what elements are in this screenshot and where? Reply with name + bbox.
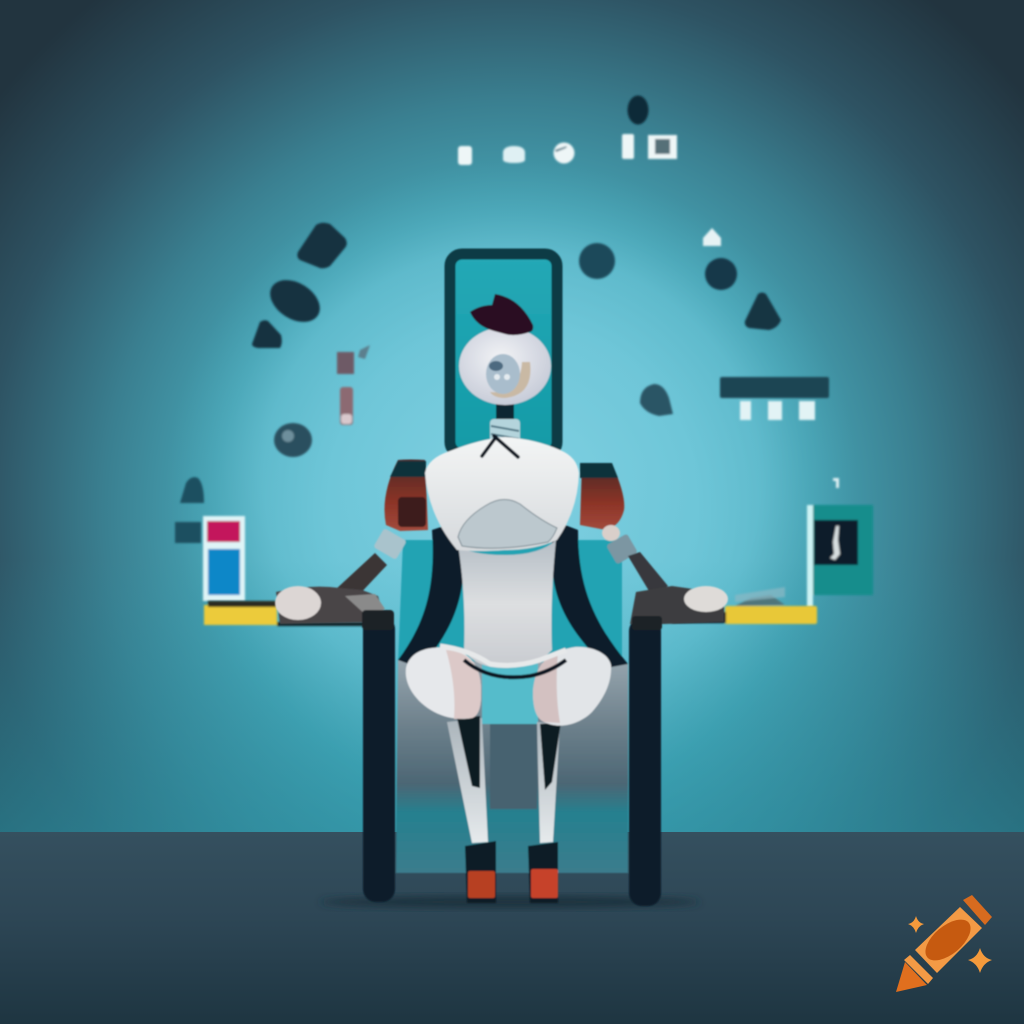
- floating icons: left arc: [175, 223, 347, 543]
- robot left arm: [275, 460, 428, 630]
- right device: green panel: [807, 505, 873, 607]
- robot right arm: [580, 463, 728, 630]
- robot feet: [465, 841, 558, 903]
- lower wall tint: [0, 560, 1024, 835]
- robot hair: [470, 294, 533, 335]
- floor shadow under chair: [320, 896, 700, 908]
- left desk tray: [204, 601, 365, 626]
- robot torso: [425, 436, 579, 551]
- robot shins: [447, 716, 561, 843]
- floating icons: top row: [458, 96, 677, 165]
- floor: [0, 832, 1024, 1024]
- floating icons: right arc: [579, 228, 839, 488]
- robot neck: [490, 396, 520, 443]
- robot head: [459, 327, 551, 405]
- icon: crayon logo: [896, 895, 992, 992]
- arched glow behind robot: [150, 150, 874, 835]
- right desk tray: [672, 587, 817, 624]
- desk legs: [363, 616, 661, 906]
- robot waist: [458, 540, 556, 668]
- chair frame behind torso: [398, 520, 628, 668]
- seat back panel behind legs: [396, 660, 628, 873]
- floating icons: pink glyphs: [337, 345, 370, 425]
- left device: tablet: [203, 516, 245, 601]
- chair back: [450, 254, 557, 454]
- teal panel behind arms: [398, 540, 622, 664]
- chair and robot figure: [275, 254, 728, 906]
- robot thighs: [406, 646, 611, 726]
